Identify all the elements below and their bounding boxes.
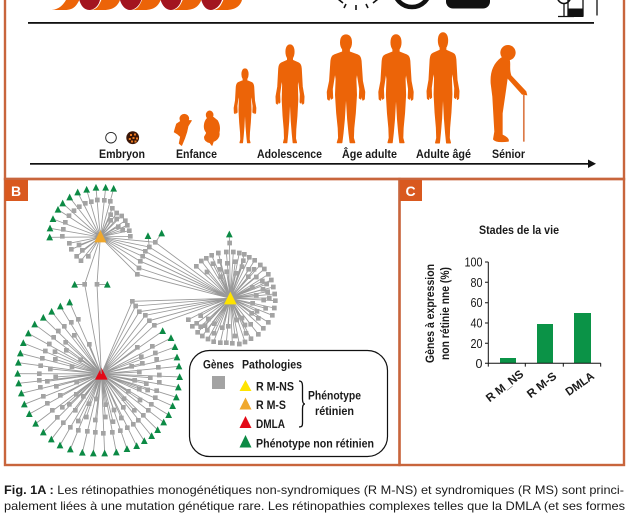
network: R M-S cluster [47,185,230,374]
legend headings [203,360,302,372]
upper timeline rule [28,22,594,24]
non-retinal phenotype nodes [47,185,164,287]
legend entries: rétinien [315,406,354,418]
life stage labels: Embryon [99,149,145,161]
network: R M-NS cluster [188,231,275,344]
adult [327,35,365,143]
y tick labels [464,256,483,371]
y tick labels: 40 [470,316,483,330]
bar chart [423,256,601,405]
brace [299,381,305,427]
y tick labels: 80 [470,276,483,290]
caption: palement liées à une mutation génétique rare. Les rétinopathies complexes telles que la DMLA (et ses formes [4,499,625,513]
panel C badge: C [406,183,416,199]
gene nodes [62,200,155,284]
legend entries: R M-S [256,400,286,412]
legend entries: Phénotype [308,390,361,402]
chart title: Stades de la vie [479,225,559,237]
x labels: DMLA [564,370,597,399]
R M-NS hub [224,292,237,304]
panel B badge: B [11,183,21,199]
y axis title [423,264,452,363]
legend headings: Pathologies [242,360,302,372]
gene nodes [188,243,275,344]
life stage labels: Adolescence [257,149,322,161]
legend [190,350,388,456]
life stage labels: Adulte âgé [416,149,471,161]
caption: Fig. 1A : Les rétinopathies monogénétiques non-syndromiques (R M-NS) et syndromiques (R MS) sont princi- [4,483,624,497]
x labels: R M_NS [484,368,526,405]
legend entries: DMLA [256,419,285,431]
network: DMLA cluster [15,298,230,456]
gene nodes [39,301,159,433]
y tick labels: 0 [476,357,483,371]
senior with cane [491,45,527,142]
icon: dark rounded block [446,0,490,8]
life stage labels [99,148,525,161]
axes [485,262,601,367]
child [234,69,256,143]
x labels: R M-S [525,370,560,401]
older adult [427,33,459,143]
baby crawling [174,114,191,145]
legend headings: Gènes [203,360,234,372]
bars [500,313,591,363]
embryo: fertilised egg [106,132,116,143]
y tick labels: 100 [464,256,483,270]
R M-S hub [94,230,106,242]
icon: ring [394,0,430,7]
non-retinal phenotype nodes [15,299,182,456]
panel C badge [400,180,422,201]
life stage labels: Sénior [492,149,525,161]
life stage labels: Enfance [176,149,217,161]
y axis title: non rétinie nne (%) [438,267,452,360]
life stage labels: Âge adulte [342,148,397,161]
embryo: morula [126,131,139,144]
legend gene symbol [212,376,225,389]
life stage figures [106,33,527,145]
y tick labels: 20 [470,337,483,351]
legend entries: Phénotype non rétinien [256,438,374,450]
baby sitting [204,111,219,145]
caption [4,483,625,513]
x labels [484,368,597,405]
non-retinal phenotype node [226,231,232,237]
adolescent [276,45,304,143]
DNA strand illustration [52,0,242,10]
legend entries [256,382,374,450]
legend triangles [240,380,252,448]
icon: sun [338,0,378,10]
lower timeline arrow [30,160,596,168]
mature adult [379,35,413,143]
legend entries: R M-NS [256,382,294,394]
panel B badge [5,180,28,201]
top icons [338,0,597,16]
icon: instrument [558,0,597,16]
y tick labels: 60 [470,296,483,310]
DMLA hub [95,367,108,380]
y axis title: Gènes à expression [423,264,437,363]
